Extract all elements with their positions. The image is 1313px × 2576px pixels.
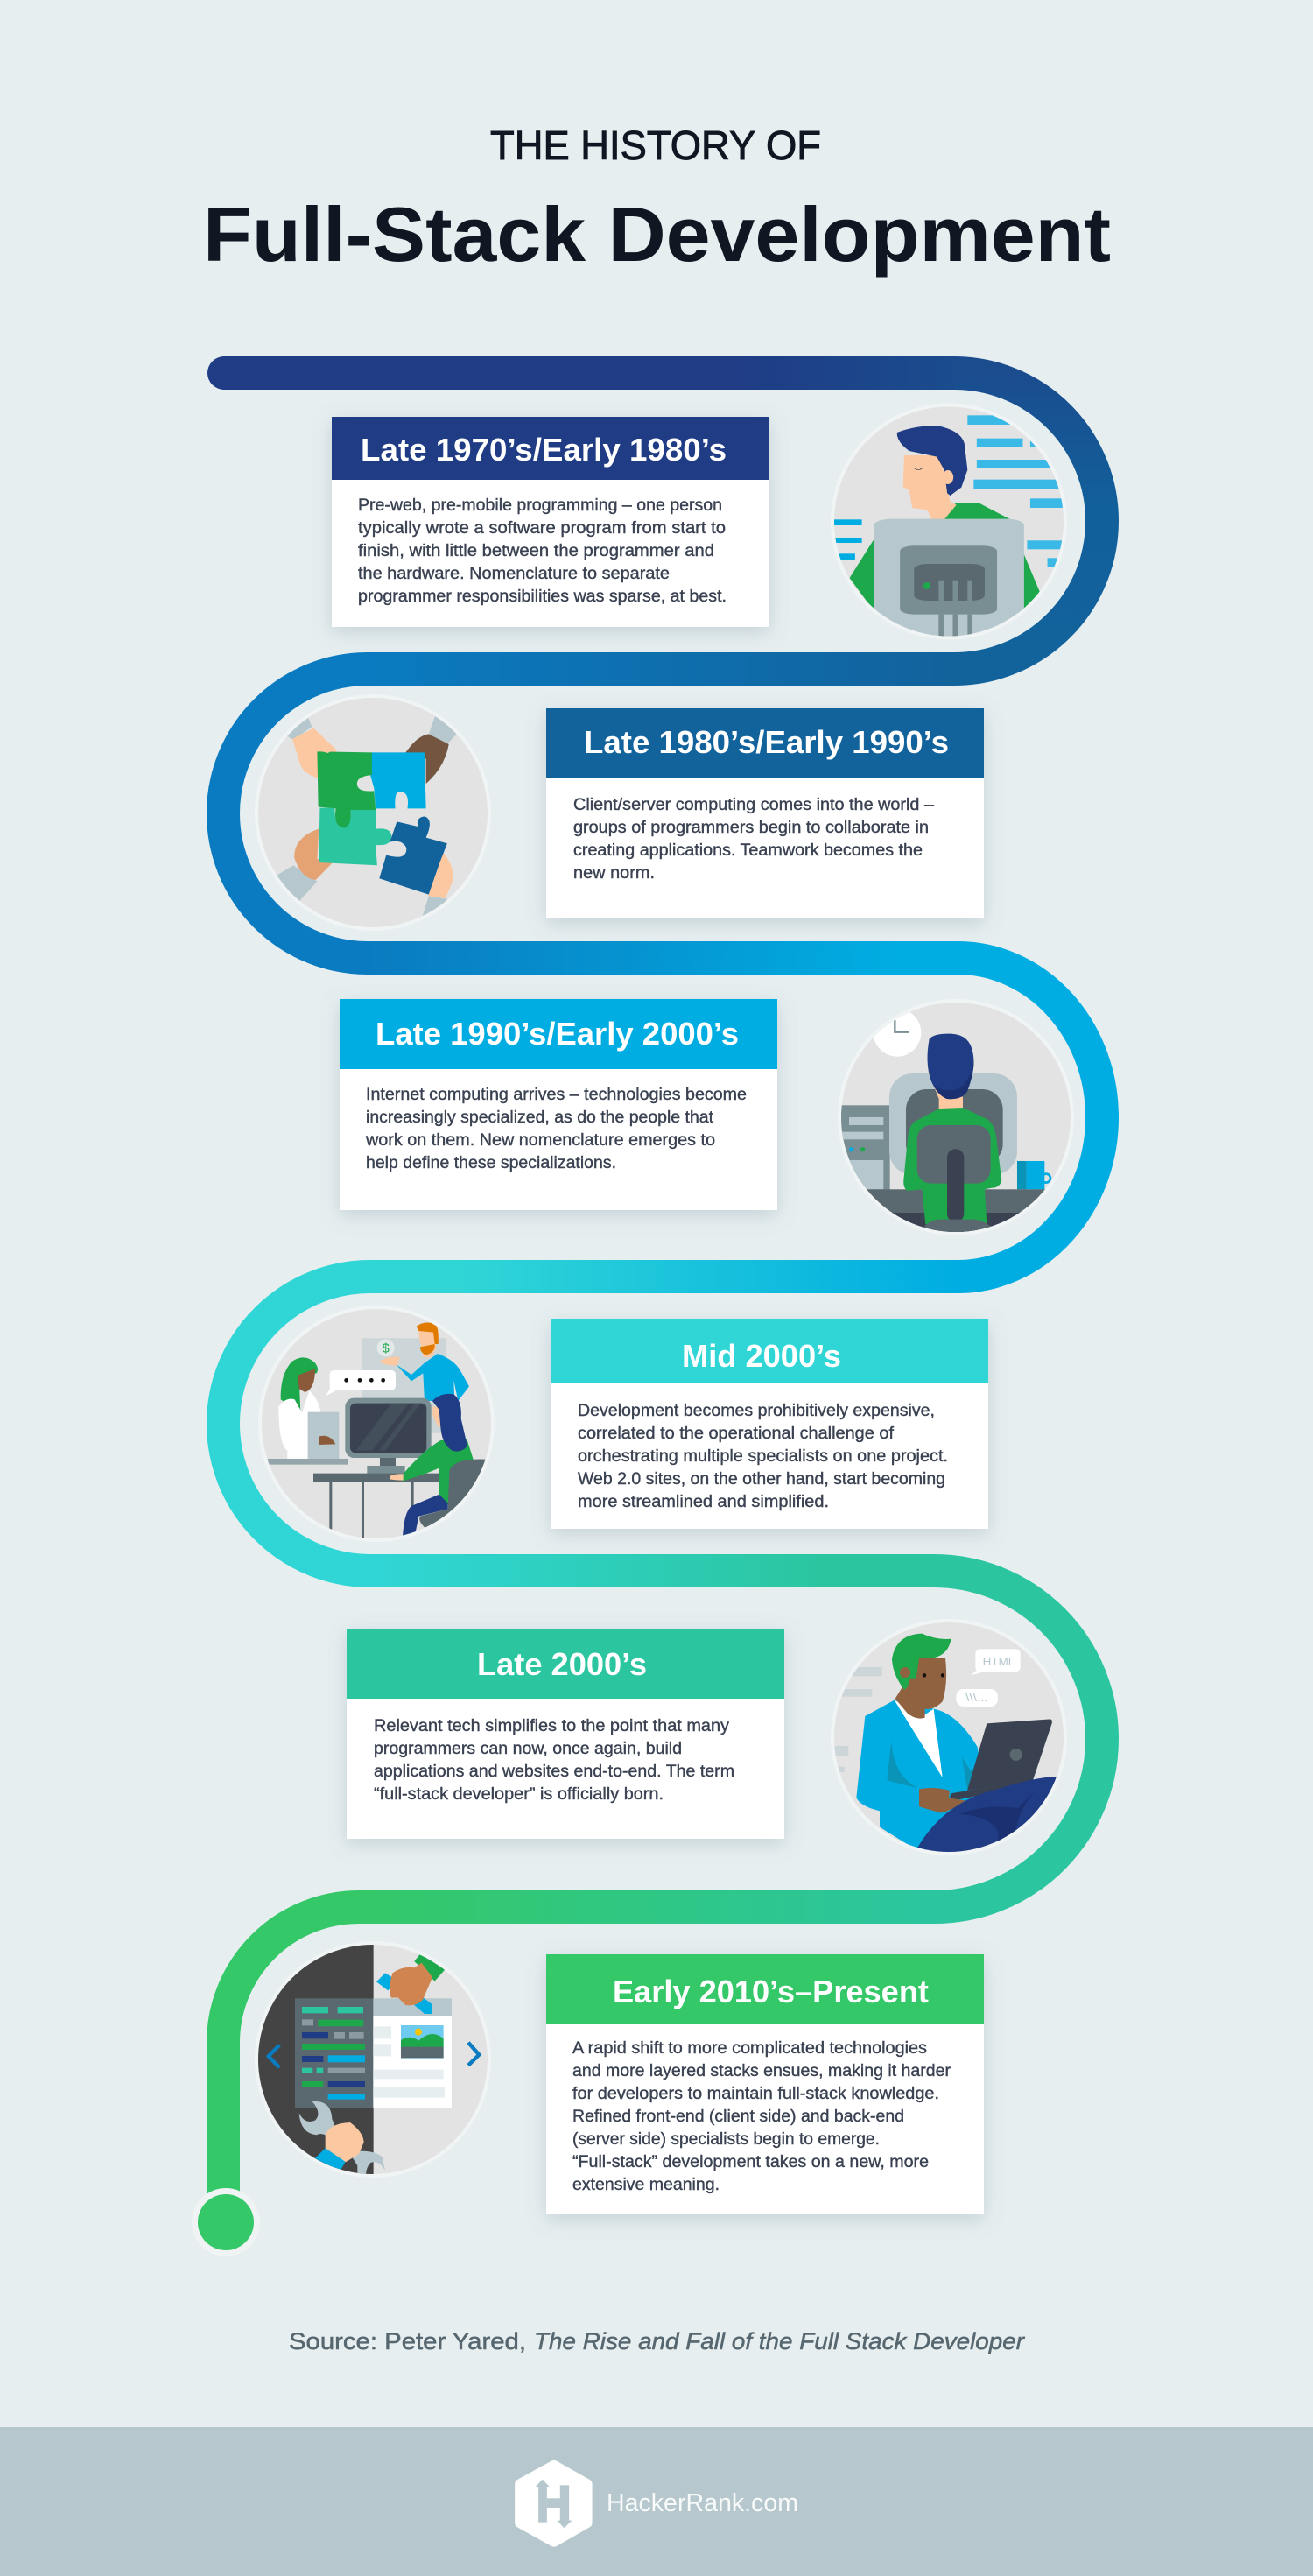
body text: [578, 1402, 948, 1511]
panel: Late 1980's/Early 1990's: [546, 708, 984, 918]
panel: Mid 2000's: [551, 1319, 988, 1529]
icon: team around a monitor: $: [383, 1342, 390, 1356]
body text: “Full-stack” development takes on a new, more: [572, 2153, 929, 2171]
body text: new norm.: [573, 864, 655, 883]
icon: team around a monitor: [258, 1306, 495, 1542]
body text: Refined front-end (client side) and back-end: [572, 2108, 904, 2126]
body text: increasingly specialized, as do the people that: [366, 1109, 714, 1127]
body text: Web 2.0 sites, on the other hand, start becoming: [578, 1470, 945, 1489]
icon: front-end and back-end split page: [251, 1941, 491, 2180]
panel: Late 1980's/Early 1990's: Late 1980’s/Early 1990’s: [584, 724, 949, 760]
body text: more streamlined and simplified.: [578, 1493, 829, 1511]
panel: Late 2000's: [347, 1629, 784, 1839]
body text: extensive meaning.: [572, 2176, 720, 2194]
body text: programmer responsibilities was sparse, at best.: [358, 588, 727, 606]
body text: (server side) specialists begin to emerge.: [572, 2130, 880, 2149]
source citation: Source: Peter Yared,: [289, 2328, 526, 2354]
body text: “full-stack developer” is officially born.: [374, 1785, 664, 1804]
body text: [573, 796, 934, 883]
panel: Early 2010's-Present: Early 2010’s–Present: [613, 1974, 929, 2009]
body text: applications and websites end-to-end. The term: [374, 1763, 734, 1781]
body text: work on them. New nomenclature emerges to: [365, 1131, 715, 1150]
footer band: [0, 2427, 1313, 2576]
body text: [358, 496, 727, 606]
panel: Early 2010's-Present: [546, 1954, 984, 2214]
body text: groups of programmers begin to collaborate in: [573, 819, 929, 837]
body text: programmers can now, once again, build: [374, 1740, 682, 1758]
panel: Late 1990's/Early 2000's: Late 1990’s/Early 2000’s: [376, 1016, 739, 1052]
source citation: [289, 2328, 1025, 2354]
body text: finish, with little between the programmer and: [358, 542, 714, 560]
icon: hands assembling puzzle: [255, 694, 491, 931]
body text: help define these specializations.: [366, 1154, 616, 1172]
body text: Relevant tech simplifies to the point that many: [374, 1717, 730, 1735]
panel: Late 2000's: Late 2000’s: [477, 1646, 647, 1682]
panel: Late 1970's/Early 1980's: Late 1970’s/Early 1980’s: [361, 432, 727, 468]
body text: A rapid shift to more complicated technologies: [572, 2039, 927, 2058]
body text: Development becomes prohibitively expensive,: [578, 1402, 935, 1420]
logo: HackerRank hexagon: [515, 2460, 593, 2547]
body text: orchestrating multiple specialists on one project.: [578, 1447, 948, 1466]
icon: developer with laptop: HTML: [983, 1656, 1015, 1668]
source citation: The Rise and Fall of the Full Stack Developer: [534, 2328, 1025, 2354]
body text: [365, 1086, 747, 1172]
icon: developer from behind at desk: [838, 999, 1079, 1239]
body text: the hardware. Nomenclature to separate: [358, 565, 670, 583]
panel: Late 1970's/Early 1980's: [332, 417, 769, 627]
body text: Internet computing arrives – technologies become: [366, 1086, 747, 1104]
track end marker: [192, 2188, 260, 2256]
winding timeline track: [223, 373, 1102, 2198]
logo text: HackerRank.com: [607, 2489, 798, 2517]
icon: developer with laptop: [831, 1619, 1067, 1859]
icon: programmer at computer: [831, 403, 1067, 647]
panel: Mid 2000's: Mid 2000’s: [682, 1338, 841, 1374]
body text: [374, 1717, 734, 1804]
heading: Full-Stack Development: Full-Stack Development: [203, 191, 1111, 278]
body text: creating applications. Teamwork becomes the: [573, 841, 923, 860]
body text: for developers to maintain full-stack knowledge.: [572, 2085, 939, 2103]
panel: Late 1990's/Early 2000's: [340, 999, 777, 1210]
body text: Client/server computing comes into the world –: [573, 796, 934, 814]
body text: [572, 2039, 951, 2194]
icon: developer with laptop: \\\...: [965, 1692, 988, 1704]
body text: and more layered stacks ensues, making it harder: [572, 2062, 951, 2080]
body text: Pre-web, pre-mobile programming – one person: [358, 496, 722, 515]
heading: The History Of: THE HISTORY OF: [490, 123, 821, 168]
body text: typically wrote a software program from start to: [358, 519, 726, 538]
body text: correlated to the operational challenge of: [578, 1425, 895, 1443]
